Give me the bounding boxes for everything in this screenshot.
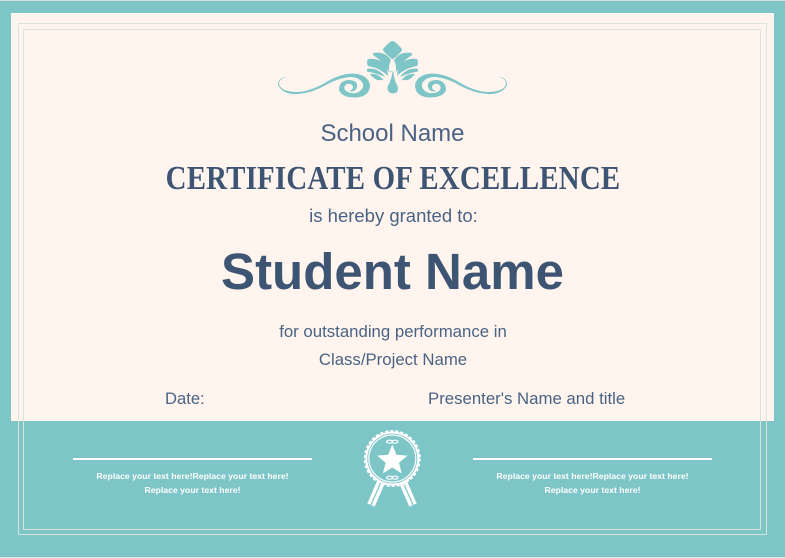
caption: left <box>96 471 289 495</box>
caption: right <box>496 471 689 495</box>
caption: right: Replace your text here!Replace your text here! <box>496 471 689 481</box>
text: hereby granted: is hereby granted to: <box>309 205 478 226</box>
caption: left: Replace your text here! <box>144 485 241 495</box>
signature line: left <box>73 458 312 460</box>
text: outstanding performance: for outstanding performance in <box>279 322 507 341</box>
caption: left: Replace your text here!Replace your text here! <box>96 471 289 481</box>
icon: floral flourish ornament <box>278 41 507 98</box>
heading: student name: Student Name <box>221 243 564 300</box>
heading: school name: School Name <box>320 120 465 147</box>
text: date label: Date: <box>165 389 205 408</box>
signature line: right <box>473 458 712 460</box>
ribbons <box>371 482 413 505</box>
title: certificate of excellence: CERTIFICATE OF EXCELLENCE <box>166 160 620 197</box>
text: class or project name: Class/Project Name <box>319 350 467 369</box>
star <box>377 444 408 473</box>
icon: award ribbon badge <box>364 430 421 507</box>
knots <box>386 440 398 479</box>
signature block: left <box>73 458 312 495</box>
text: presenter label: Presenter's Name and title <box>428 389 625 408</box>
caption: right: Replace your text here! <box>544 485 641 495</box>
signature block: right <box>473 458 712 495</box>
panel: cream certificate body <box>11 13 774 421</box>
seal <box>365 432 419 486</box>
